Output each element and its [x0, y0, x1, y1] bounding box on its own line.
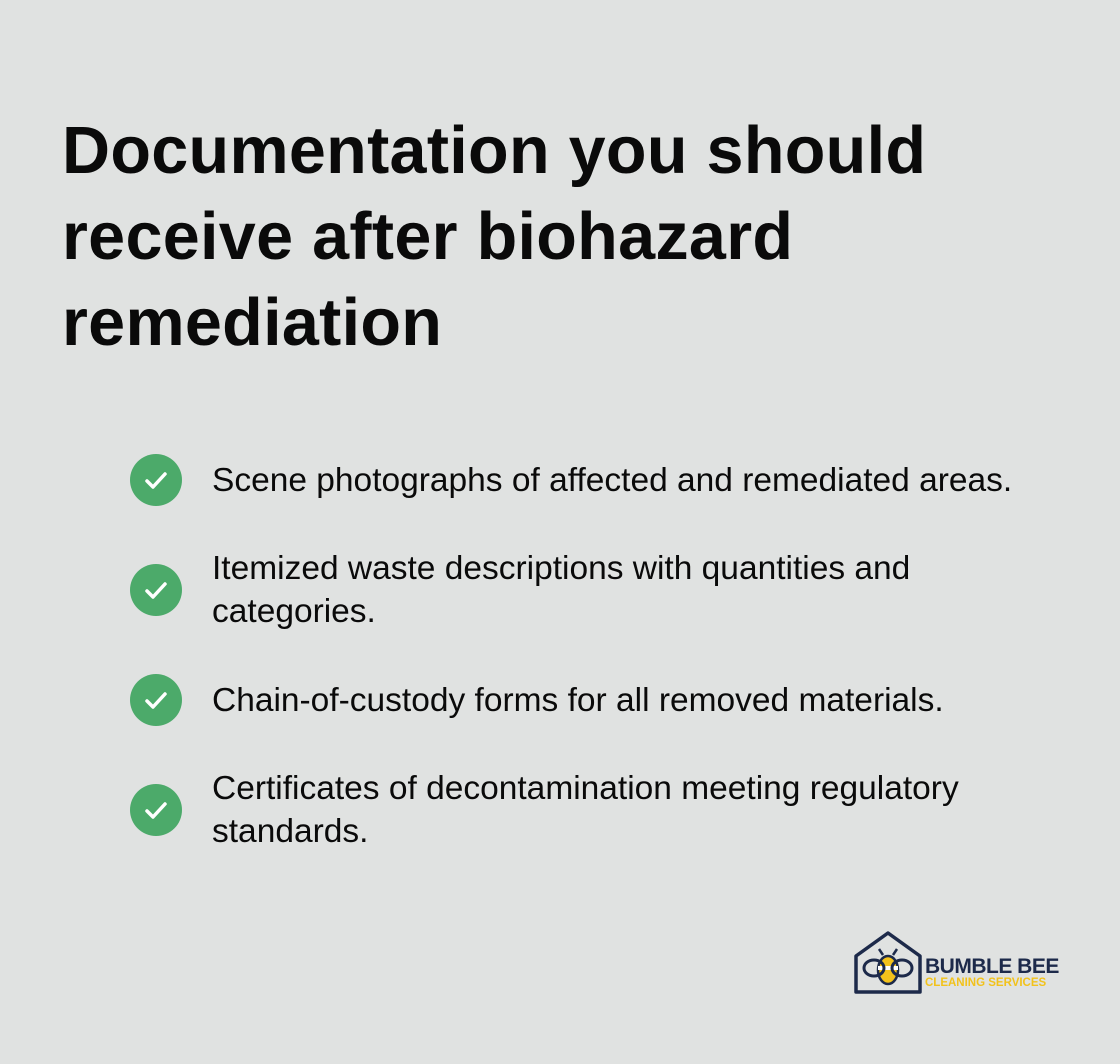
title: remediation: [62, 286, 442, 360]
title: Documentation you should: [62, 114, 926, 188]
icon: bee house: [854, 931, 922, 994]
item 2: [130, 550, 910, 630]
title: [62, 114, 926, 360]
logo: [854, 931, 1059, 994]
text: Scene photographs of affected and remediated areas.: [212, 462, 1012, 499]
item 3: [130, 674, 944, 726]
item 1: [130, 454, 1012, 506]
text: Chain-of-custody forms for all removed materials.: [212, 682, 944, 719]
icon: check: [130, 454, 182, 506]
title: receive after biohazard: [62, 200, 793, 274]
text: Certificates of decontamination meeting regulatory standards.: [212, 770, 959, 850]
logo: CLEANING SERVICES: [925, 977, 1046, 989]
icon: check: [130, 674, 182, 726]
item 4: [130, 770, 959, 850]
icon: check: [130, 784, 182, 836]
logo text: BUMBLE BEE: [925, 955, 1059, 978]
text: Itemized waste descriptions with quantities and categories.: [212, 550, 910, 630]
icon: check: [130, 564, 182, 616]
